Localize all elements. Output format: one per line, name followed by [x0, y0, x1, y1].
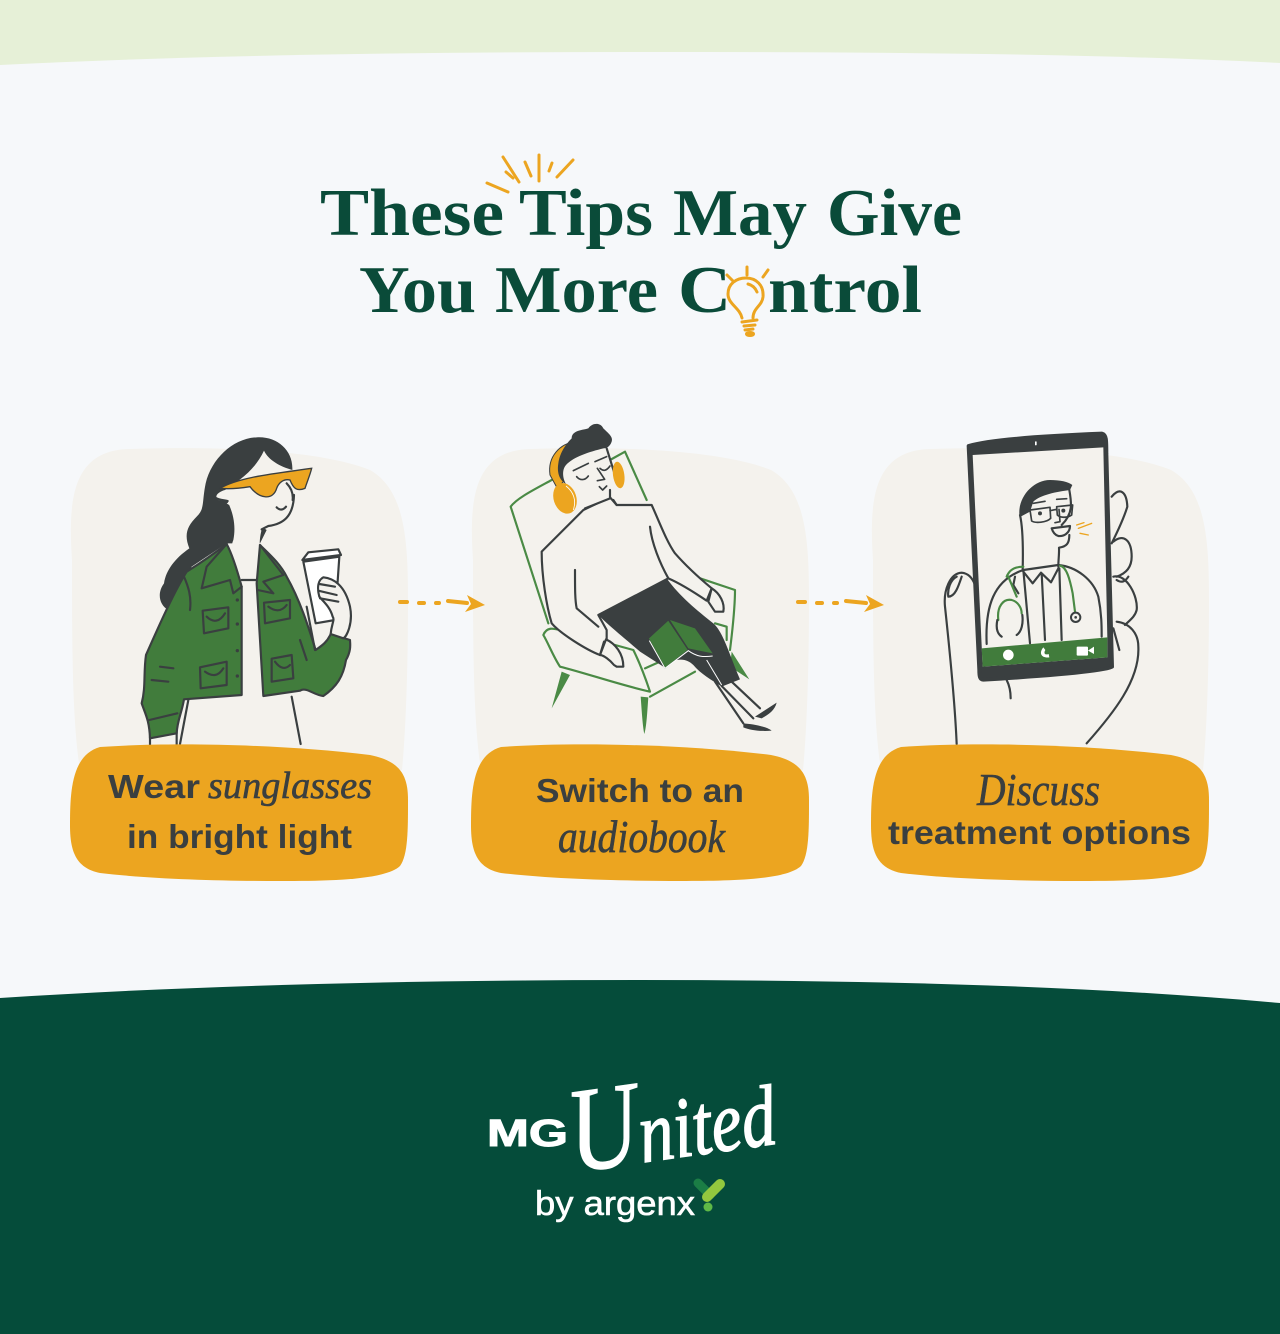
title: You	[359, 253, 476, 327]
title: These	[320, 176, 504, 250]
logo wordmark MG: MG	[487, 1113, 568, 1155]
title: May	[673, 176, 807, 250]
title: Control	[678, 253, 922, 327]
illustration: man resting with headphones	[511, 424, 777, 734]
caption text	[108, 765, 372, 855]
caption text: treatment options	[888, 814, 1191, 851]
card background	[472, 448, 809, 770]
title: Give	[827, 176, 962, 250]
main panel	[0, 52, 1280, 1010]
caption text: audiobook	[558, 811, 726, 862]
top band	[0, 0, 1280, 80]
title: Tips	[519, 176, 653, 250]
icon: sparkle rays above title	[487, 155, 573, 192]
logo: MG United by argenx	[487, 1037, 783, 1223]
panel: audiobook tip	[471, 424, 809, 881]
caption pill	[70, 744, 408, 881]
caption text: Switch to an	[536, 772, 744, 809]
title	[320, 176, 962, 327]
caption text	[888, 764, 1191, 851]
caption pill	[471, 744, 809, 881]
panel: treatment tip	[871, 434, 1209, 881]
arrow: second to third	[798, 595, 884, 612]
caption text	[536, 772, 744, 862]
caption pill	[871, 744, 1209, 881]
icon: light bulb	[727, 267, 768, 336]
footer band	[0, 980, 1280, 1334]
arrow: first to second	[400, 595, 485, 612]
logo wordmark United: United	[559, 1037, 783, 1198]
caption text: sunglasses	[208, 765, 372, 807]
title: More	[495, 253, 658, 327]
card background	[872, 448, 1209, 770]
illustration: hand holding phone with doctor	[945, 434, 1138, 744]
card background	[71, 448, 408, 770]
caption text: Wear	[108, 768, 200, 805]
illustration: woman with sunglasses and coffee	[142, 437, 351, 745]
logo wordmark by argenx: by argenx	[535, 1185, 695, 1223]
trousers	[598, 578, 740, 687]
panel: sunglasses tip	[70, 437, 408, 881]
caption text: in bright light	[127, 818, 352, 855]
book	[648, 620, 688, 668]
caption text: Discuss	[976, 764, 1100, 815]
icon: argenx check mark	[698, 1183, 720, 1212]
